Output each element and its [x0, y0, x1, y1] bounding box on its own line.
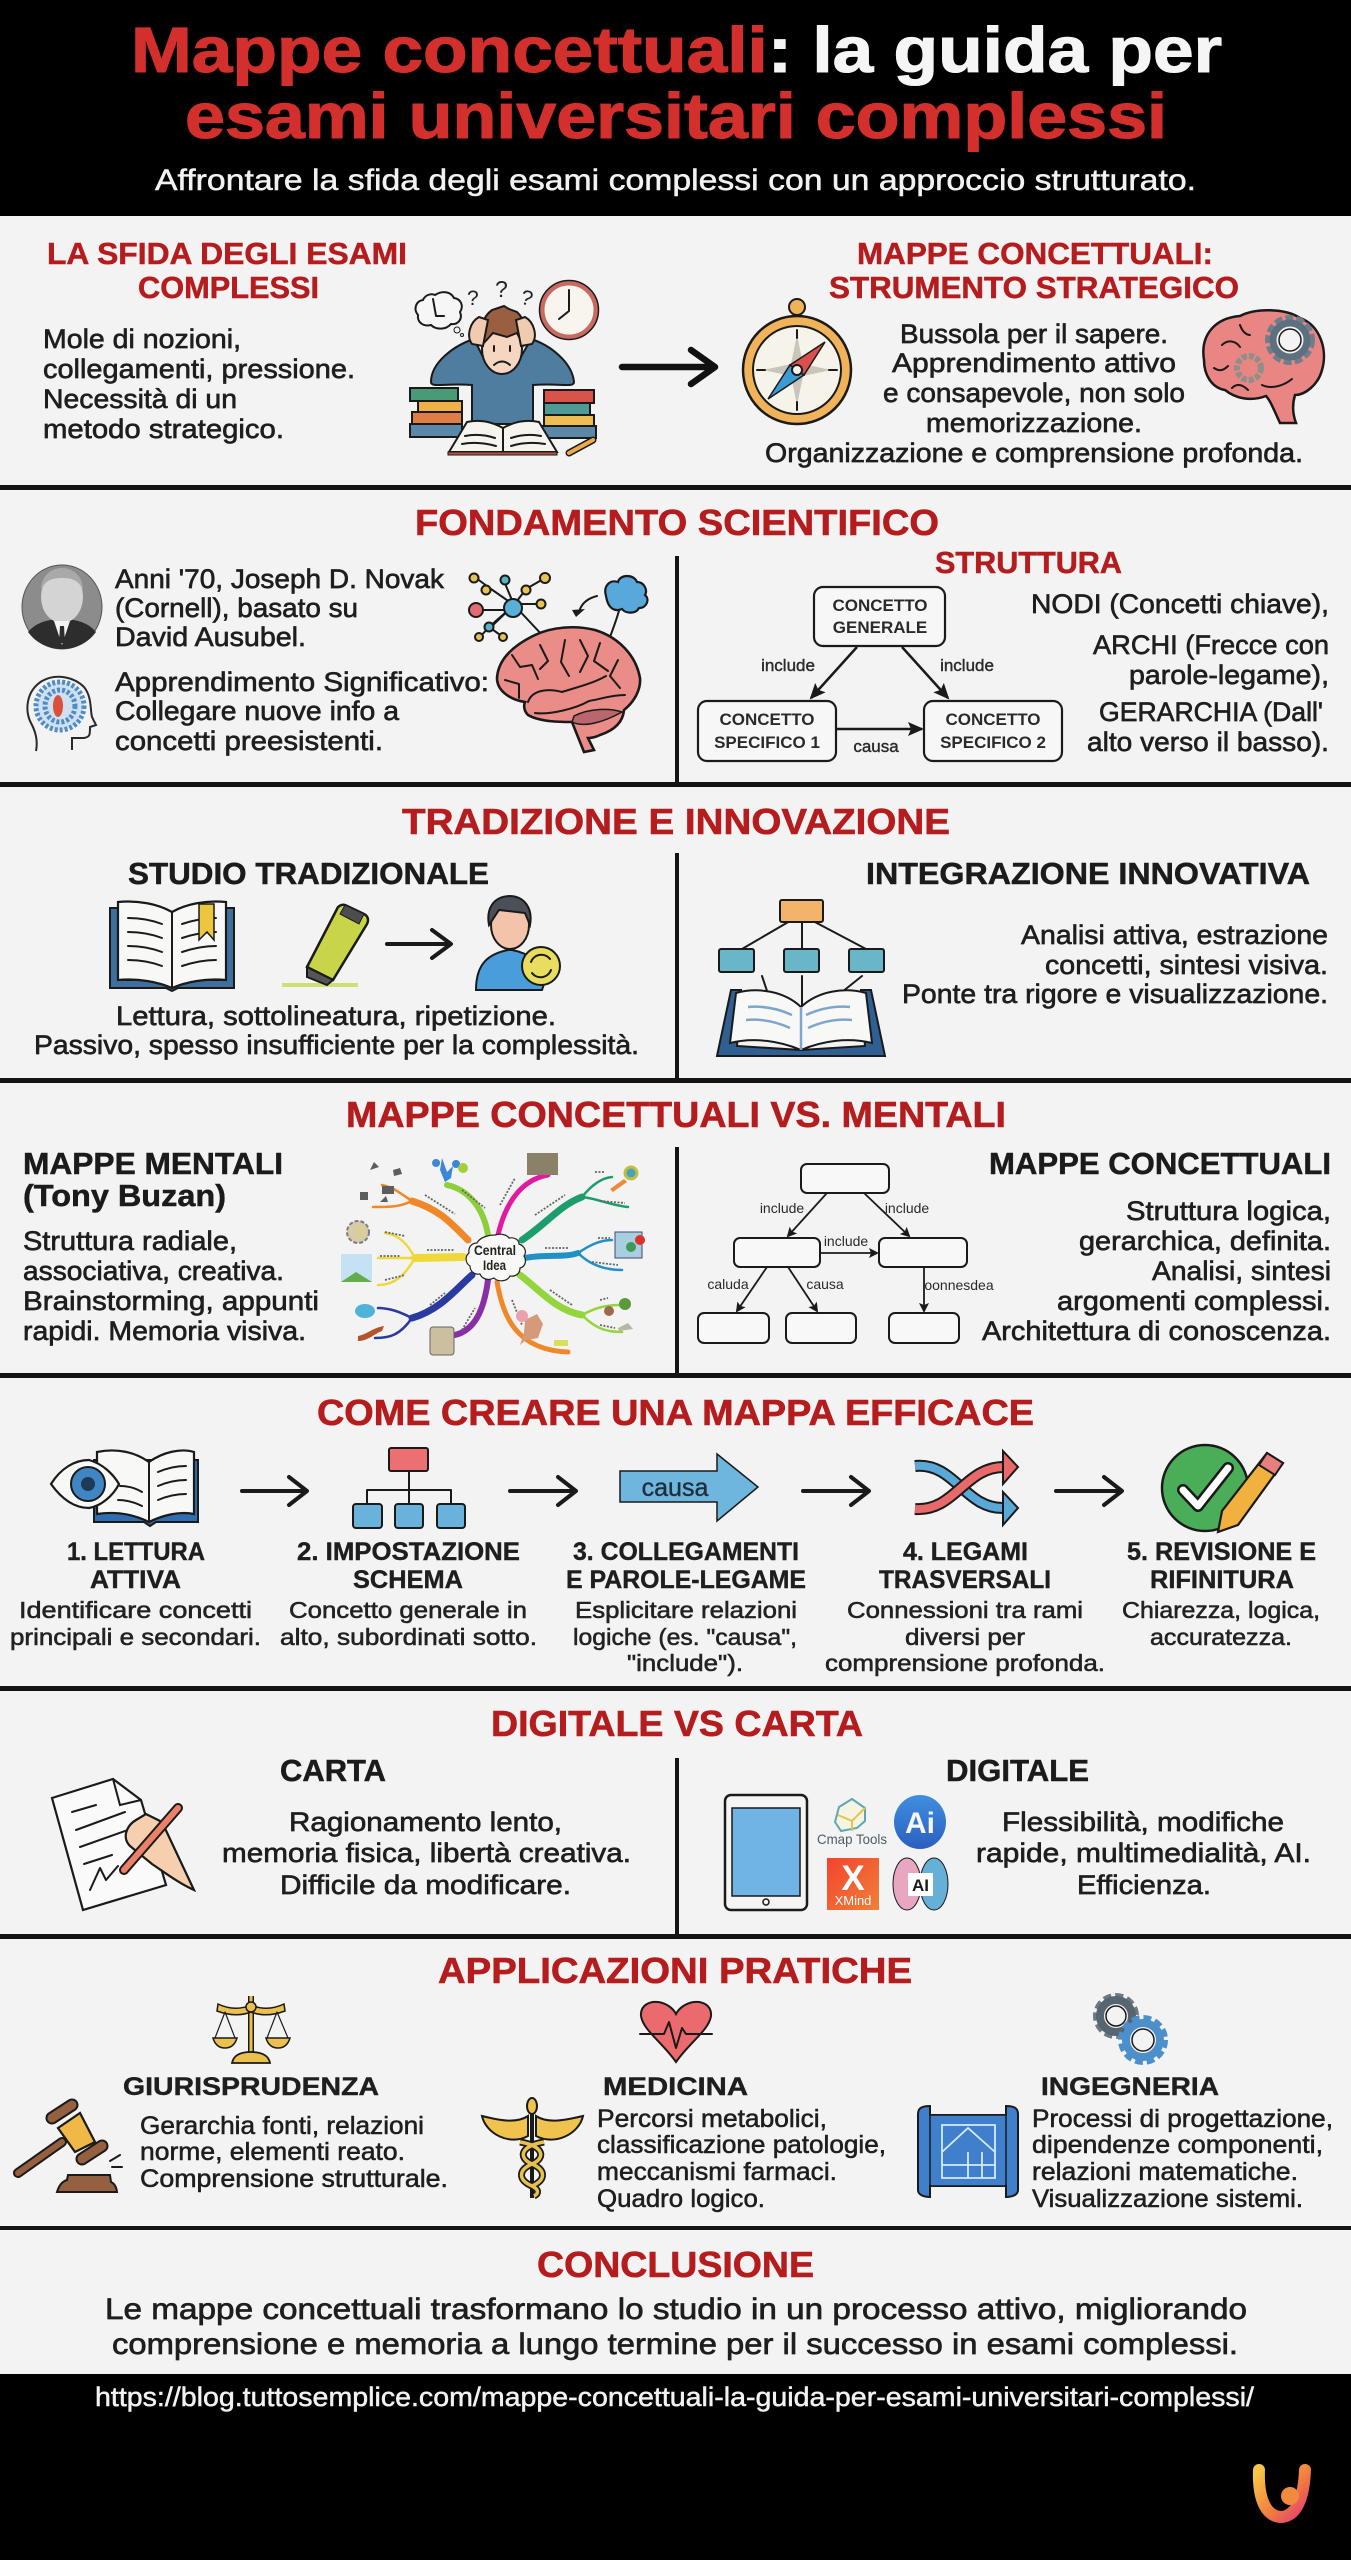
icon: AI badge	[894, 1795, 946, 1849]
text: struttura: NODI (Concetti chiave),	[1031, 589, 1329, 619]
heading: mappe mentali: (Tony Buzan)	[23, 1178, 226, 1213]
panel: tradizione e innovazione	[34, 801, 1328, 1060]
text: Novak: David Ausubel.	[115, 622, 306, 652]
text: strumento strategico: e consapevole, non solo	[883, 378, 1185, 408]
text: step 5: 5. REVISIONE E	[1127, 1538, 1316, 1566]
source url: https://blog.tuttosemplice.com/mappe-concettuali-la-guida-per-esami-universitari-complessi/	[95, 2382, 1255, 2412]
text: la sfida: Necessità di un	[43, 384, 237, 414]
text: digitale: Flessibilità, modifiche	[1002, 1807, 1284, 1837]
header band	[0, 0, 1351, 216]
title	[131, 14, 1222, 152]
node: concetto specifico 2: CONCETTO	[945, 710, 1041, 729]
step 2: impostazione schema	[280, 1448, 576, 1650]
application: medicina	[482, 2002, 886, 2213]
section dividers	[0, 485, 1351, 2230]
text: medicina	[597, 2105, 886, 2213]
text: integrazione innovativa	[902, 920, 1328, 1009]
text: step 2: Concetto generale in	[289, 1597, 527, 1623]
application: giurisprudenza	[18, 1996, 448, 2193]
arrow: step 4 to 5	[1056, 1477, 1122, 1505]
step 5: revisione e rifinitura	[1122, 1445, 1320, 1650]
text: la sfida: Mole di nozioni,	[43, 324, 241, 354]
node: concetto specifico 2: SPECIFICO 2	[940, 733, 1046, 752]
text: mappe concettuali: gerarchica, definita.	[1079, 1226, 1331, 1256]
text: step 2	[280, 1538, 537, 1650]
text: digitale: rapide, multimedialità, AI.	[976, 1838, 1311, 1868]
panel: mappe concettuali vs mentali	[23, 1094, 1331, 1355]
heading: digitale vs carta: DIGITALE VS CARTA	[491, 1703, 863, 1744]
node: concetto specifico 1: SPECIFICO 1	[714, 733, 820, 752]
chart: concept map: oonnesdea	[924, 1277, 994, 1293]
arrow: step 3 to 4	[803, 1477, 869, 1505]
chart: concept map: causa	[806, 1276, 844, 1292]
icon: brain with gears	[1203, 310, 1324, 423]
heading: mappe mentali	[23, 1146, 283, 1213]
icon: portrait of Novak	[22, 565, 102, 649]
text: carta: memoria fisica, libertà creativa.	[222, 1838, 631, 1868]
icon: AI brain: AI	[912, 1876, 929, 1895]
text: strumento strategico	[765, 319, 1303, 468]
text: giurisprudenza: Gerarchia fonti, relazioni	[140, 2112, 424, 2140]
text: carta: Difficile da modificare.	[280, 1870, 571, 1900]
text: ingegneria: relazioni matematiche.	[1032, 2158, 1298, 2186]
text: strumento strategico: memorizzazione.	[926, 408, 1142, 438]
text: integrazione innovativa: Analisi attiva, estrazione	[1021, 920, 1328, 950]
text: carta	[222, 1807, 631, 1900]
panel: applicazioni pratiche	[18, 1950, 1333, 2213]
text: ingegneria: Processi di progettazione,	[1032, 2105, 1333, 2133]
icon: XMind: X	[841, 1859, 865, 1898]
title: Mappe concettuali : la guida per	[131, 14, 1222, 86]
text: apprendimento significativo	[115, 667, 489, 756]
text: mappe concettuali: Struttura logica,	[1126, 1196, 1331, 1226]
text: medicina: classificazione patologie,	[597, 2131, 886, 2159]
text: studio tradizionale	[34, 1001, 639, 1060]
heading: carta: CARTA	[280, 1753, 386, 1788]
text: struttura: GERARCHIA (Dall'	[1099, 697, 1323, 727]
step 4: legami trasversali	[825, 1451, 1122, 1676]
text: step 1: Identificare concetti	[19, 1597, 252, 1623]
text: step 5: Chiarezza, logica,	[1122, 1597, 1320, 1623]
node: concetto specifico 2	[924, 701, 1062, 761]
icon: causa arrow: causa	[642, 1474, 708, 1502]
arrow: study flow	[387, 930, 451, 958]
text: step 3: Esplicitare relazioni	[575, 1597, 797, 1623]
text: conclusione	[105, 2293, 1247, 2361]
text: strumento strategico: Bussola per il sapere.	[900, 319, 1168, 349]
icon: check and pencil	[1162, 1445, 1283, 1532]
heading: strumento strategico: STRUMENTO STRATEGICO	[829, 270, 1239, 305]
node: concetto specifico 1: CONCETTO	[719, 710, 815, 729]
heading: mappe concettuali vs mentali: MAPPE CONCETTUALI VS. MENTALI	[346, 1094, 1006, 1135]
heading: fondamento scientifico: FONDAMENTO SCIENTIFICO	[415, 502, 939, 543]
text: step 5	[1122, 1538, 1320, 1650]
text: mappe mentali: Brainstorming, appunti	[23, 1286, 319, 1316]
text: step 1	[10, 1538, 261, 1650]
subtitle: Affrontare la sfida degli esami complessi con un approccio strutturato.	[155, 164, 1196, 197]
icon: stressed student	[410, 276, 598, 455]
text: strumento strategico: Organizzazione e comprensione profonda.	[765, 438, 1303, 468]
text: giurisprudenza: norme, elementi reato.	[140, 2138, 405, 2166]
icon: person	[476, 896, 560, 990]
panel: digitale vs carta	[52, 1703, 1311, 1910]
icon: XMind: XMind	[835, 1893, 871, 1908]
icon: hand writing on paper	[52, 1779, 194, 1910]
icon: Cmap Tools	[817, 1799, 887, 1847]
text: medicina: meccanismi farmaci.	[597, 2158, 837, 2186]
panel: come creare una mappa efficace	[10, 1392, 1320, 1676]
node: concetto specifico 1	[698, 701, 836, 761]
heading: studio tradizionale: STUDIO TRADIZIONALE	[128, 856, 489, 891]
icon: open book	[110, 901, 234, 991]
text: step 3	[566, 1538, 806, 1676]
node: concetto generale: CONCETTO	[832, 596, 928, 615]
text: mappe concettuali: Architettura di conoscenza.	[982, 1316, 1331, 1346]
text: step 4	[825, 1538, 1105, 1676]
text: integrazione innovativa: Ponte tra rigore e visualizzazione.	[902, 979, 1328, 1009]
text: step 3: logiche (es. "causa",	[573, 1624, 797, 1650]
icon: tablet	[725, 1795, 807, 1910]
icon: gavel	[18, 2105, 122, 2192]
text: Novak: (Cornell), basato su	[115, 593, 358, 623]
icon: stressed student: ?	[467, 287, 479, 310]
text: mappe mentali	[23, 1226, 319, 1346]
title: esami universitari complessi	[185, 80, 1167, 152]
text: giurisprudenza: Comprensione strutturale.	[140, 2165, 448, 2193]
text: mappe concettuali: argomenti complessi.	[1057, 1286, 1331, 1316]
heading: tradizione e innovazione: TRADIZIONE E INNOVAZIONE	[402, 801, 950, 842]
arrow: step 2 to 3	[510, 1477, 576, 1505]
heading: integrazione innovativa: INTEGRAZIONE INNOVATIVA	[866, 856, 1310, 891]
heading: mappe concettuali: MAPPE CONCETTUALI	[989, 1146, 1331, 1181]
heading: applicazioni pratiche: APPLICAZIONI PRATICHE	[438, 1950, 912, 1991]
icon: head with brain	[27, 677, 96, 751]
step 1: lettura attiva	[10, 1450, 307, 1650]
icon: stressed student: ?	[495, 276, 508, 302]
heading: come creare: COME CREARE UNA MAPPA EFFICACE	[317, 1392, 1034, 1433]
heading: struttura: STRUTTURA	[935, 545, 1122, 580]
arrows and link labels: include	[761, 656, 815, 675]
application: ingegneria	[918, 1998, 1333, 2213]
text: strumento strategico: Apprendimento attivo	[892, 348, 1176, 378]
icon: blueprint	[918, 2106, 1018, 2197]
arrows and link labels: include	[940, 656, 994, 675]
arrow: step 1 to 2	[242, 1477, 307, 1505]
text: step 3: E PAROLE-LEGAME	[566, 1566, 806, 1594]
text: struttura: ARCHI (Frecce con	[1093, 630, 1329, 660]
text: studio tradizionale: Lettura, sottolineatura, ripetizione.	[116, 1001, 556, 1031]
icon: XMind	[827, 1858, 879, 1910]
icon: AI badge: Ai	[905, 1807, 935, 1840]
text: step 2: SCHEMA	[353, 1566, 463, 1594]
icon: eye and book	[51, 1450, 198, 1526]
panel: la sfida degli esami	[43, 236, 1324, 468]
icon: scales	[213, 1996, 290, 2063]
heading: digitale: DIGITALE	[946, 1753, 1089, 1788]
chart: concept map: caluda	[707, 1276, 749, 1292]
text: conclusione: Le mappe concettuali trasformano lo studio in un processo attivo, migliorando	[105, 2293, 1247, 2326]
text: apprendimento significativo: concetti preesistenti.	[115, 726, 383, 756]
icon: heart	[640, 2002, 712, 2062]
text: conclusione: comprensione e memoria a lungo termine per il successo in esami complessi.	[112, 2328, 1238, 2361]
diagram: concept map structure	[698, 587, 1062, 761]
arrows and link labels: causa	[853, 737, 899, 756]
chart: concept map: include	[824, 1233, 868, 1249]
text: step 4: TRASVERSALI	[879, 1566, 1051, 1594]
heading: medicina: MEDICINA	[603, 2073, 748, 2101]
text: Novak	[115, 564, 445, 652]
text: studio tradizionale: Passivo, spesso insufficiente per la complessità.	[34, 1030, 639, 1060]
step 3: collegamenti e parole-legame	[566, 1454, 869, 1676]
icon: book to map diagram	[717, 900, 885, 1056]
text: step 1: 1. LETTURA	[67, 1538, 205, 1566]
icon: AI brain	[893, 1858, 948, 1910]
text: mappe mentali: rapidi. Memoria visiva.	[23, 1316, 306, 1346]
chart: concept map	[698, 1164, 994, 1343]
chart: mind map: Idea	[483, 1257, 506, 1273]
text: Novak: Anni '70, Joseph D. Novak	[115, 564, 445, 594]
chart: mind map	[341, 1153, 645, 1355]
node: concetto generale	[814, 587, 945, 646]
text: digitale: Efficienza.	[1077, 1870, 1211, 1900]
text: la sfida	[43, 324, 355, 444]
text: giurisprudenza	[140, 2112, 448, 2193]
heading: giurisprudenza: GIURISPRUDENZA	[123, 2073, 379, 2101]
text: mappe concettuali: Analisi, sintesi	[1152, 1256, 1331, 1286]
icon: caduceus	[482, 2098, 583, 2198]
icon: highlighter	[282, 905, 368, 985]
panel: conclusione	[105, 2244, 1247, 2361]
icon: crossing arrows	[915, 1451, 1018, 1525]
heading: strumento strategico: MAPPE CONCETTUALI:	[857, 236, 1213, 271]
text: step 5: accuratezza.	[1150, 1624, 1292, 1650]
text: step 5: RIFINITURA	[1150, 1566, 1294, 1594]
chart: concept map: include	[885, 1200, 929, 1216]
arrow: challenge to tool	[622, 350, 715, 384]
icon: compass	[743, 299, 851, 424]
text: carta: Ragionamento lento,	[289, 1807, 562, 1837]
chart: mind map: Central	[474, 1242, 516, 1258]
heading: mappe mentali: MAPPE MENTALI	[23, 1146, 283, 1181]
node: concetto generale: GENERALE	[833, 618, 927, 637]
footer band	[0, 2374, 1351, 2560]
arrows and link labels	[761, 647, 994, 756]
text: step 2: alto, subordinati sotto.	[280, 1624, 537, 1650]
text: ingegneria: dipendenze componenti,	[1032, 2131, 1323, 2159]
icon: brain and network	[469, 573, 647, 752]
text: ingegneria: Visualizzazione sistemi.	[1032, 2185, 1303, 2213]
text: apprendimento significativo: Apprendimento Significativo:	[115, 667, 489, 697]
text: la sfida: collegamenti, pressione.	[43, 354, 355, 384]
text: struttura: parole-legame),	[1129, 660, 1329, 690]
text: step 2: 2. IMPOSTAZIONE	[297, 1538, 520, 1566]
text: ingegneria	[1032, 2105, 1333, 2213]
icon: hierarchy	[353, 1448, 465, 1528]
heading: strumento strategico	[829, 236, 1239, 305]
icon: logo	[1259, 2470, 1305, 2517]
icon: causa arrow	[620, 1454, 758, 1521]
icon: Cmap Tools: Cmap Tools	[817, 1831, 887, 1847]
text: step 4: comprensione profonda.	[825, 1650, 1105, 1676]
heading: conclusione: CONCLUSIONE	[537, 2244, 814, 2285]
text: apprendimento significativo: Collegare nuove info a	[115, 696, 400, 726]
text: step 4: diversi per	[905, 1624, 1025, 1650]
panel: fondamento scientifico	[22, 502, 1329, 761]
chart: concept map: include	[760, 1200, 804, 1216]
text: step 1: principali e secondari.	[10, 1624, 261, 1650]
text: step 1: ATTIVA	[90, 1566, 181, 1594]
text: mappe mentali: associativa, creativa.	[23, 1256, 284, 1286]
heading: la sfida: LA SFIDA DEGLI ESAMI	[47, 236, 407, 271]
text: la sfida: metodo strategico.	[43, 414, 284, 444]
icon: gears	[1098, 1998, 1163, 2060]
heading: la sfida	[47, 236, 407, 305]
heading: la sfida: COMPLESSI	[138, 270, 319, 305]
text: medicina: Percorsi metabolici,	[597, 2105, 827, 2133]
text: mappe concettuali	[982, 1196, 1331, 1346]
text: step 4: 4. LEGAMI	[903, 1538, 1028, 1566]
text: mappe mentali: Struttura radiale,	[23, 1226, 237, 1256]
text: step 3: 3. COLLEGAMENTI	[573, 1538, 799, 1566]
text: step 4: Connessioni tra rami	[847, 1597, 1083, 1623]
text: integrazione innovativa: concetti, sintesi visiva.	[1045, 950, 1328, 980]
icon: stressed student: ?	[518, 286, 535, 311]
text: struttura	[1031, 589, 1329, 757]
text: medicina: Quadro logico.	[597, 2185, 765, 2213]
text: step 3: "include").	[627, 1650, 743, 1676]
text: digitale	[976, 1807, 1311, 1900]
heading: ingegneria: INGEGNERIA	[1041, 2073, 1219, 2101]
text: struttura: alto verso il basso).	[1087, 727, 1329, 757]
